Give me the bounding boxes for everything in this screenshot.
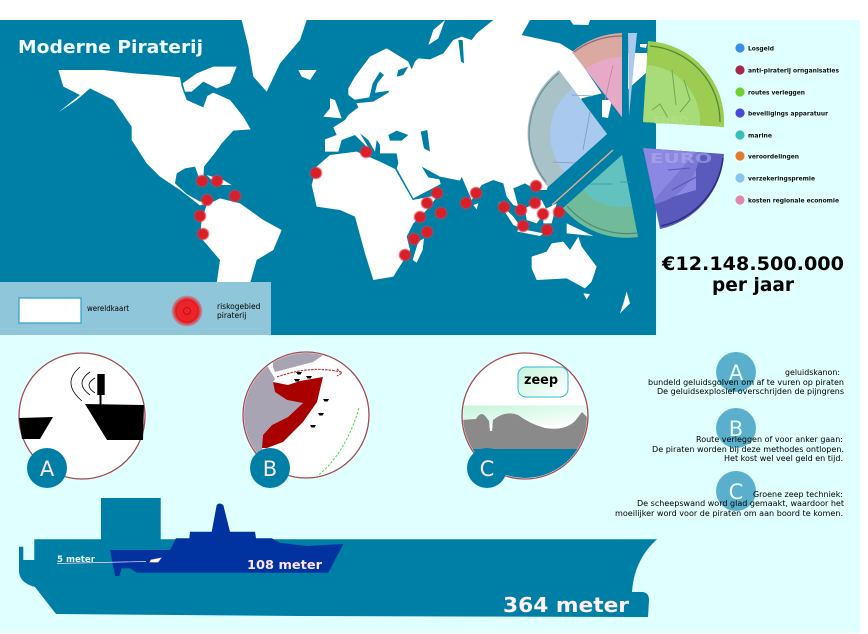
soap bar — [518, 367, 568, 397]
water — [472, 449, 578, 478]
soap layer — [460, 406, 590, 425]
legend item: marine — [735, 130, 773, 140]
badge B: B — [263, 457, 277, 481]
badge A — [27, 448, 67, 488]
pie sector: kosten regionale economie — [572, 33, 622, 117]
pirate route arrow — [277, 369, 342, 377]
warship silhouette — [110, 504, 343, 576]
explanation A: De geluidsexplosief overschrijden de pijngrens — [657, 387, 844, 396]
pie legend — [735, 43, 840, 205]
explanation C: Groene zeep techniek: — [753, 490, 843, 499]
explanation B: Route verleggen of voor anker gaan: — [696, 435, 843, 444]
explanation C: De scheepswand word glad gemaakt, waardoor het — [637, 499, 844, 508]
illustration B: somalia route — [240, 348, 369, 480]
pie chart: euro coin — [528, 33, 724, 238]
legend item: routes verleggen — [735, 87, 805, 97]
title: Moderne Piraterij — [18, 37, 203, 58]
illustration C: green soap — [460, 353, 590, 481]
explanation C: C — [729, 480, 743, 504]
total cost: €12.148.500.000 — [661, 253, 844, 275]
illustration A: sound cannon — [19, 353, 145, 479]
land — [244, 353, 323, 453]
map: japan and kamchatka — [602, 44, 647, 118]
badge C — [467, 448, 507, 488]
label: 364 meter: 364 meter — [503, 593, 629, 617]
legend item: losgeld: Losgeld — [748, 44, 774, 52]
legend label: risk area: riskogebied — [217, 302, 261, 311]
pie sector: beveiligings apparatuur: EURO — [650, 152, 712, 167]
legend item: anti-piraterij organisaties: anti-piraterij ornganisaties — [748, 66, 839, 74]
map: piracy risk markers — [194, 146, 566, 262]
badge A: A — [40, 457, 55, 481]
large tanker silhouette — [19, 498, 657, 617]
pie hub band — [548, 33, 640, 208]
legend label: risk area: piraterij — [217, 311, 246, 320]
map: europe, asia, africa, oceania — [312, 20, 630, 313]
pie sector: verzekeringspremie — [528, 70, 607, 187]
explanation B — [652, 408, 844, 463]
legend item: veroordelingen — [735, 151, 799, 161]
pirate skiff — [57, 558, 161, 564]
explanation C — [615, 471, 844, 518]
map legend — [0, 282, 271, 335]
legend item: kosten regionale economie: kosten regionale economie — [748, 196, 840, 204]
pirate ships — [294, 372, 329, 428]
badge C: C — [480, 457, 494, 481]
ship size comparison — [19, 498, 657, 617]
explanation B: B — [729, 417, 743, 441]
map: americas and greenland — [58, 20, 317, 283]
explanation A: geluidskanon: — [785, 368, 840, 377]
total cost: per jaar — [712, 274, 795, 296]
alternate green route — [316, 408, 359, 477]
legend swatch: world map — [19, 298, 81, 323]
legend item: veroordelingen: veroordelingen — [748, 152, 799, 160]
sound waves — [71, 367, 95, 401]
pirate boat — [19, 417, 53, 439]
legend item: losgeld — [735, 43, 774, 53]
label: 5 meter: 5 meter — [57, 555, 96, 565]
explanation A: bundeld geluidsgolven om af te vuren op piraten — [648, 378, 844, 387]
pie sector: veroordelingen — [552, 150, 613, 205]
legend swatch: risk area — [172, 296, 202, 326]
hull — [460, 412, 590, 449]
badge B — [250, 448, 290, 488]
explanation B: Het kost wel veel geld en tijd. — [724, 454, 843, 463]
explanation C: moeilijker word voor de piraten om aan boord te komen. — [615, 509, 843, 518]
panel: world map — [0, 20, 656, 335]
label: 108 meter: 108 meter — [247, 558, 322, 572]
pie sector: losgeld — [628, 33, 637, 116]
explanation A — [648, 352, 844, 396]
legend item: beveiligings apparatuur: beveiligings apparatuur — [748, 110, 829, 118]
somalia — [262, 377, 323, 448]
total cost — [661, 253, 844, 296]
soap label: zeep — [524, 373, 558, 388]
map: inland seas — [353, 40, 464, 152]
pie sector: routes verleggen — [643, 41, 724, 127]
pie sector: beveiligings apparatuur — [643, 148, 724, 229]
legend item: routes verleggen: routes verleggen — [748, 88, 805, 96]
ship with sound cannon — [85, 374, 144, 440]
pie sector: marine — [563, 155, 638, 238]
explanation A: A — [729, 361, 744, 385]
pie sector: routes verleggen: EURO — [654, 114, 688, 127]
legend label: world map: wereldkaart — [87, 304, 129, 313]
legend item: marine: marine — [748, 132, 773, 140]
explanation B: De piraten worden bij deze methodes ontlopen. — [652, 445, 844, 454]
legend item: verzekeringspremie: verzekeringspremie — [748, 174, 816, 182]
